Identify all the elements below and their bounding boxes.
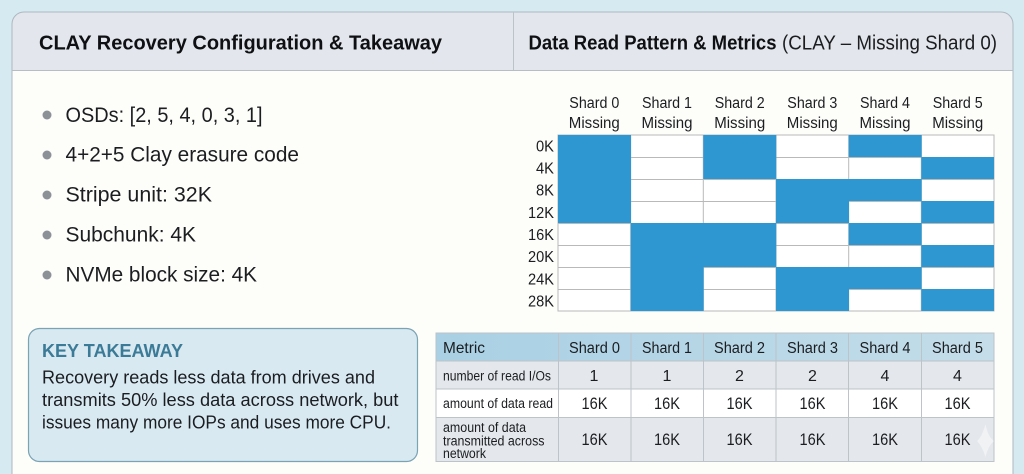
row: amount of data read: 16K — [944, 395, 970, 413]
bullet: erasure code: 4+2+5 Clay erasure code — [66, 144, 299, 166]
row: amount of data read: 16K — [726, 395, 752, 413]
key takeaway heading: KEY TAKEAWAY — [42, 340, 184, 361]
panel: key takeaway — [28, 328, 418, 462]
column headers: Shard 5 — [933, 95, 983, 112]
column headers: Shard 1 — [642, 95, 692, 112]
bullet: NVMe block size: NVMe block size: 4K — [66, 264, 257, 286]
heading: configuration and takeaway: CLAY Recovery Configuration & Takeaway — [39, 32, 443, 54]
row: amount of data transmitted across network — [443, 420, 970, 461]
column headers: Missing — [860, 115, 910, 132]
table header row: Shard 5 — [932, 340, 983, 357]
column headers: Missing — [932, 115, 983, 132]
table header row: Shard 2 — [714, 340, 765, 357]
row: amount of data read: 16K — [800, 395, 826, 413]
column headers: Missing — [569, 115, 620, 132]
bullet: stripe unit: Stripe unit: 32K — [66, 184, 212, 206]
row: amount of data transmitted across network: transmitted across — [443, 434, 545, 448]
table header row: Metric — [443, 340, 485, 357]
row: amount of data transmitted across network: network — [443, 446, 486, 461]
row: number of read IOs — [443, 368, 962, 385]
key takeaway body: Recovery reads less data from drives and — [42, 368, 375, 388]
row: amount of data read: 16K — [654, 395, 680, 413]
row labels: 16K — [528, 227, 554, 244]
key takeaway body — [42, 368, 398, 432]
row: amount of data transmitted across network: 16K — [582, 431, 608, 449]
row: amount of data transmitted across network: 16K — [872, 431, 898, 449]
row: amount of data transmitted across network: 16K — [654, 431, 680, 449]
row: number of read IOs: 2 — [808, 368, 817, 385]
configuration bullet list — [42, 104, 299, 286]
row labels: 4K — [536, 160, 554, 178]
table header row: Shard 0 — [569, 340, 620, 357]
row: number of read IOs: 4 — [881, 368, 890, 385]
column headers: Missing — [714, 115, 765, 132]
table header row — [443, 340, 983, 357]
row: number of read IOs: 1 — [663, 368, 672, 385]
row: amount of data read: 16K — [582, 395, 608, 413]
grid cells — [558, 135, 994, 311]
column headers: Shard 4 — [860, 95, 910, 112]
column headers: Missing — [787, 115, 838, 132]
row: amount of data transmitted across network: 16K — [800, 431, 826, 449]
row labels — [528, 138, 554, 310]
column headers: Shard 2 — [715, 95, 765, 112]
row labels: 28K — [528, 294, 554, 310]
row: number of read IOs: number of read I/Os — [443, 368, 551, 384]
key takeaway body: transmits 50% less data across network, but — [42, 390, 398, 410]
column headers — [569, 95, 983, 132]
heading: data read pattern and metrics: (CLAY – Missing Shard 0) — [782, 32, 997, 54]
row: amount of data read — [443, 395, 970, 413]
chart: data read pattern grid — [528, 95, 994, 311]
row: amount of data transmitted across network: amount of data — [443, 420, 526, 435]
row: number of read IOs: 4 — [953, 368, 962, 385]
row: amount of data read: 16K — [872, 395, 898, 413]
heading: data read pattern and metrics: Data Read Pattern & Metrics — [528, 32, 776, 54]
key takeaway body: issues many more IOPs and uses more CPU. — [42, 412, 391, 432]
bullet: OSDs: OSDs: [2, 5, 4, 0, 3, 1] — [66, 104, 262, 127]
row labels: 12K — [528, 205, 554, 222]
row labels: 8K — [536, 183, 554, 200]
row labels: 24K — [528, 272, 554, 288]
row labels: 20K — [528, 249, 554, 266]
table header row: Shard 1 — [642, 340, 692, 357]
bullet: subchunk: Subchunk: 4K — [66, 224, 196, 246]
row: number of read IOs: 1 — [590, 368, 599, 385]
row labels: 0K — [536, 138, 554, 156]
column headers: Missing — [642, 115, 692, 132]
column headers: Shard 3 — [787, 95, 837, 112]
column headers: Shard 0 — [569, 95, 620, 112]
row: number of read IOs: 2 — [735, 368, 744, 385]
table: metrics — [436, 333, 994, 462]
icon: watermark sparkle — [977, 424, 994, 457]
row: amount of data read: amount of data read — [443, 396, 553, 411]
table header row: Shard 3 — [787, 340, 838, 357]
row: amount of data transmitted across network: 16K — [944, 431, 970, 449]
table header row: Shard 4 — [860, 340, 911, 357]
row: amount of data transmitted across network: 16K — [726, 431, 752, 449]
heading: data read pattern and metrics — [528, 32, 997, 54]
